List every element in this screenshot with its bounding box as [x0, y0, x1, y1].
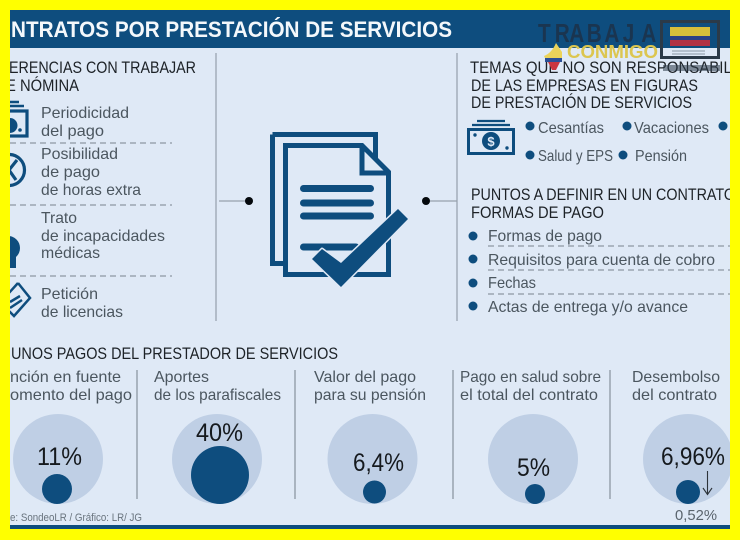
column: health: el total del contrato	[460, 387, 598, 404]
column: parafiscal contributions: de los parafiscales	[154, 387, 281, 404]
text: medical leave: médicas	[41, 245, 100, 262]
icon: money	[468, 121, 514, 154]
heading: points	[472, 188, 730, 218]
header bar	[10, 10, 730, 48]
connector: right	[422, 197, 457, 205]
heading: payments: UNOS PAGOS DEL PRESTADOR DE SERVICIOS	[11, 345, 338, 363]
text: medical leave: de incapacidades	[41, 228, 165, 245]
text: leave requests: Petición	[41, 286, 98, 303]
text: overtime: de horas extra	[41, 182, 141, 199]
heading: differences: ERENCIAS CON TRABAJAR	[9, 59, 196, 77]
column: disbursement: Desembolso	[632, 369, 720, 386]
heading: topics: DE PRESTACIÓN DE SERVICIOS	[471, 93, 692, 112]
text: overtime: Posibilidad	[41, 146, 118, 163]
text: overtime	[42, 148, 141, 195]
column: health: Pago en salud sobre	[460, 369, 601, 386]
panel: differences with payroll	[0, 59, 196, 321]
list: points: Requisitos para cuenta de cobro	[488, 252, 715, 269]
icon: money: $	[487, 134, 495, 149]
column: withholding: 11%	[37, 443, 82, 471]
list: points	[468, 228, 730, 316]
text: periodicity: del pago	[41, 123, 104, 140]
title: NTRATOS POR PRESTACIÓN DE SERVICIOS	[11, 17, 452, 42]
text: leave requests: de licencias	[41, 304, 123, 321]
text: overtime: de pago	[41, 164, 100, 181]
text: periodicity	[41, 105, 129, 140]
bottom bar	[10, 525, 730, 529]
heading: points: FORMAS DE PAGO	[471, 204, 604, 222]
text: medical leave: Trato	[41, 210, 77, 227]
list: topics: Pensión	[635, 148, 687, 165]
heading: topics	[470, 62, 730, 108]
source note: e: SondeoLR / Gráfico: LR/ JG	[10, 512, 142, 524]
list: topics: Vacaciones	[634, 120, 709, 137]
list: topics: Cesantías	[538, 120, 604, 137]
list: points: Actas de entrega y/o avance	[488, 299, 688, 316]
watermark logo	[538, 19, 720, 71]
column: pension	[314, 369, 426, 504]
text: leave requests	[42, 288, 122, 317]
heading: differences	[10, 62, 196, 91]
connector: left	[219, 197, 253, 205]
text: medical leave	[41, 212, 164, 258]
watermark: wordmark: TRABAJA	[538, 19, 656, 48]
heading: differences: E NÓMINA	[6, 76, 79, 95]
column: disbursement: 6,96%	[661, 443, 725, 471]
column: withholding	[10, 369, 132, 504]
column: withholding: nción en fuente	[10, 369, 121, 386]
icon: form and pen	[8, 283, 30, 316]
column: disbursement: 0,52%	[675, 507, 717, 524]
icon: clock	[10, 152, 26, 188]
column: pension: Valor del pago	[314, 369, 416, 386]
column: pension: para su pensión	[314, 387, 426, 404]
list: points: Formas de pago	[488, 228, 602, 245]
list: topics: Salud y EPS	[538, 148, 613, 165]
column: health: 5%	[517, 454, 550, 482]
column: health	[460, 369, 601, 504]
text: periodicity: Periodicidad	[41, 105, 129, 122]
icon: document with check mark	[272, 134, 408, 287]
icon: bills	[5, 102, 27, 136]
column: disbursement	[632, 369, 733, 524]
column: withholding: omento del pago	[10, 387, 132, 404]
list: points: Fechas	[488, 275, 536, 292]
column: parafiscal contributions	[154, 369, 281, 504]
list: topics	[526, 120, 728, 165]
column: disbursement: del contrato	[632, 387, 717, 404]
panel: points to define	[468, 186, 735, 316]
column: parafiscal contributions: 40%	[196, 419, 243, 447]
column: parafiscal contributions: Aportes	[154, 369, 209, 386]
icon: person	[10, 236, 20, 268]
watermark logo: CONMIGO	[567, 42, 658, 62]
column: pension: 6,4%	[353, 449, 404, 477]
watermark: laptop flag	[662, 22, 720, 71]
panel: company responsibilities	[468, 59, 736, 165]
watermark: bird flag	[544, 43, 562, 70]
heading: topics: DE LAS EMPRESAS EN FIGURAS	[471, 77, 698, 95]
